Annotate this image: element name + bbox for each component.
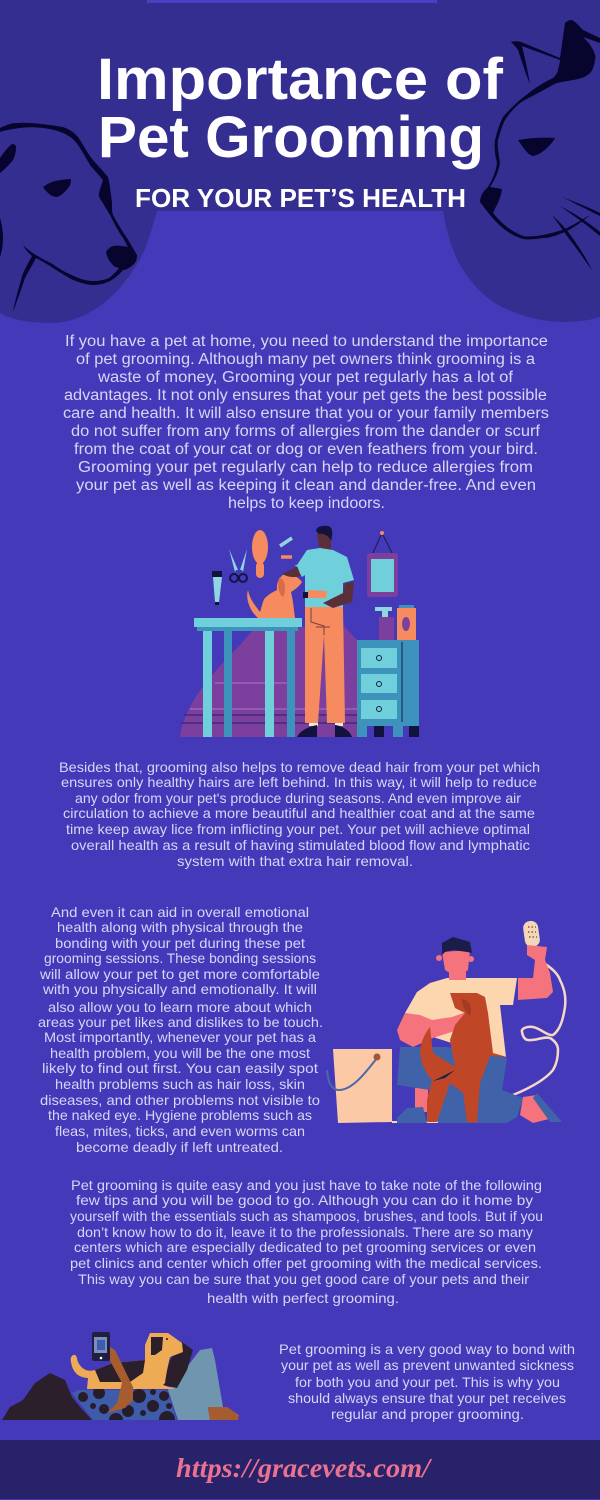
hose xyxy=(513,962,565,1095)
paragraph: closing: Pet grooming is a very good way to bond with xyxy=(279,1341,575,1357)
title: Pet Grooming xyxy=(98,105,484,170)
paragraph: tips: centers which are especially dedicated to pet grooming services or even xyxy=(74,1239,536,1255)
intro paragraph: of pet grooming. Although many pet owners think grooming is a xyxy=(76,351,535,368)
paragraph: emotional health: bonding with your pet during these pet xyxy=(55,935,305,951)
intro paragraph: waste of money, Grooming your pet regularly has a lot of xyxy=(97,369,514,386)
paragraph: emotional health: the naked eye. Hygiene problems such as xyxy=(48,1107,312,1123)
paragraph: emotional health: will allow your pet to get more comfortable xyxy=(39,966,320,982)
paragraph: dead hair removal: time keep away lice from inflicting your pet. Your pet will achieve optimal xyxy=(66,821,530,837)
paragraph: emotional health: fleas, mites, ticks, and even worms can xyxy=(55,1123,305,1139)
subtitle: FOR YOUR PET’S HEALTH xyxy=(135,183,466,213)
paragraph: tips: pet clinics and center which offer pet grooming with the medical services. xyxy=(70,1255,542,1271)
paragraph: emotional health: health problems such as hair loss, skin xyxy=(55,1076,305,1092)
paragraph: emotional health: And even it can aid in overall emotional xyxy=(51,904,309,920)
paragraph: emotional health: diseases, and other problems not visible to xyxy=(40,1092,320,1108)
illustration: man holding dog with shower hose xyxy=(327,920,565,1123)
arm on dog xyxy=(397,1010,475,1047)
paragraph: dead hair removal: overall health as a result of having stimulated blood flow and lymphatic xyxy=(71,837,530,853)
dog xyxy=(247,573,302,618)
paragraph: emotional health: health along with physical through the xyxy=(57,919,303,935)
arm xyxy=(107,1347,133,1413)
paragraph: dead hair removal: ensures only healthy hairs are left behind. In this way, it will help to reduce xyxy=(61,774,537,790)
bottles xyxy=(375,605,416,640)
paragraph: dead hair removal: circulation to achieve a more beautiful and healthier coat and at the same xyxy=(63,805,535,821)
paragraph: dead hair removal: Besides that, grooming also helps to remove dead hair from your pet which xyxy=(59,759,540,775)
paragraph: tips xyxy=(70,1177,543,1306)
paragraph: dead hair removal: any odor from your pet's produce during seasons. And even improve air xyxy=(75,790,521,806)
paragraph: tips: yourself with the essentials such as shampoos, brushes, and tools. But if you xyxy=(70,1208,543,1224)
intro paragraph: your pet as well as keeping it clean and dander-free. And even xyxy=(76,477,536,494)
intro paragraph xyxy=(63,333,549,512)
shower head xyxy=(522,920,541,948)
legs xyxy=(168,1348,223,1420)
title xyxy=(97,47,504,170)
illustration: groomer with dog at table xyxy=(180,526,419,737)
paragraph: tips: This way you can be sure that you get good care of your pets and their xyxy=(78,1271,529,1287)
footer link: https://gracevets.com/ xyxy=(176,1453,433,1483)
paragraph: emotional health: grooming sessions. These bonding sessions xyxy=(44,950,316,966)
paragraph: closing: for both you and your pet. This is why you xyxy=(295,1374,560,1390)
paragraph: closing: should always ensure that your pet receives xyxy=(288,1390,566,1406)
intro paragraph: advantages. It not only ensures that your pet gets the best possible xyxy=(64,387,547,404)
paragraph: emotional health: health problem, you will be the one most xyxy=(50,1045,310,1061)
intro paragraph: from the coat of your cat or dog or even feathers from your bird. xyxy=(74,441,538,458)
paragraph: emotional health: Most importantly, whenever your pet has a xyxy=(44,1029,316,1045)
background shape xyxy=(180,625,357,737)
icon: dog silhouette xyxy=(0,123,137,312)
illustration: person lying with dog and tablet xyxy=(2,1332,239,1427)
paragraph: closing xyxy=(279,1341,575,1422)
t-shirt xyxy=(405,978,517,1057)
paragraph: closing: regular and proper grooming. xyxy=(331,1406,524,1422)
paragraph: emotional health: with you physically and emotionally. It will xyxy=(42,981,317,997)
patterned shirt xyxy=(72,1389,177,1420)
grooming table xyxy=(194,618,302,737)
tablet xyxy=(92,1332,110,1361)
paragraph: tips: Pet grooming is quite easy and you just have to take note of the following xyxy=(71,1177,542,1193)
paragraph: dead hair removal: system with that extra hair removal. xyxy=(177,853,413,869)
intro paragraph: care and health. It will also ensure that you or your family members xyxy=(63,405,549,422)
tools: clipper, scissors, brush, bones xyxy=(212,530,292,605)
groomer xyxy=(282,526,354,737)
paragraph: dead hair removal xyxy=(59,759,540,869)
paragraph: emotional health: also allow you to learn more about which xyxy=(48,999,312,1015)
hair xyxy=(2,1373,92,1420)
arm raised xyxy=(518,945,553,1000)
footer band xyxy=(0,1440,600,1499)
intro paragraph: Grooming your pet regularly can help to reduce allergies from xyxy=(78,459,533,476)
man legs and feet xyxy=(397,1047,562,1123)
paragraph: emotional health xyxy=(38,904,323,1155)
paragraph: tips: health with perfect grooming. xyxy=(207,1290,399,1306)
paragraph: emotional health: become deadly if left untreated. xyxy=(76,1139,283,1155)
paragraph: closing: your pet as well as prevent unwanted sickness xyxy=(281,1357,574,1373)
intro paragraph: If you have a pet at home, you need to understand the importance xyxy=(65,333,548,350)
title: Importance of xyxy=(97,47,504,112)
paragraph: tips: few tips and you will be good to go. Although you can do it home by xyxy=(76,1192,533,1208)
icon: cat silhouette xyxy=(480,20,600,270)
dog xyxy=(420,993,507,1123)
paragraph: emotional health: likely to find out first. You can easily spot xyxy=(42,1060,318,1076)
intro paragraph: helps to keep indoors. xyxy=(228,495,385,512)
paragraph: emotional health: areas your pet likes and dislikes to be touch. xyxy=(38,1014,323,1030)
bucket xyxy=(327,1049,467,1123)
intro paragraph: do not suffer from any forms of allergies from the dander or scurf xyxy=(71,423,541,440)
drawer cabinet xyxy=(357,640,419,737)
wall mirror xyxy=(367,531,398,597)
paragraph: tips: don’t know how to do it, leave it to the professionals. There are so many xyxy=(77,1224,533,1240)
header background xyxy=(0,0,600,323)
head xyxy=(436,937,474,980)
dog xyxy=(71,1333,193,1389)
shoe xyxy=(208,1407,239,1420)
